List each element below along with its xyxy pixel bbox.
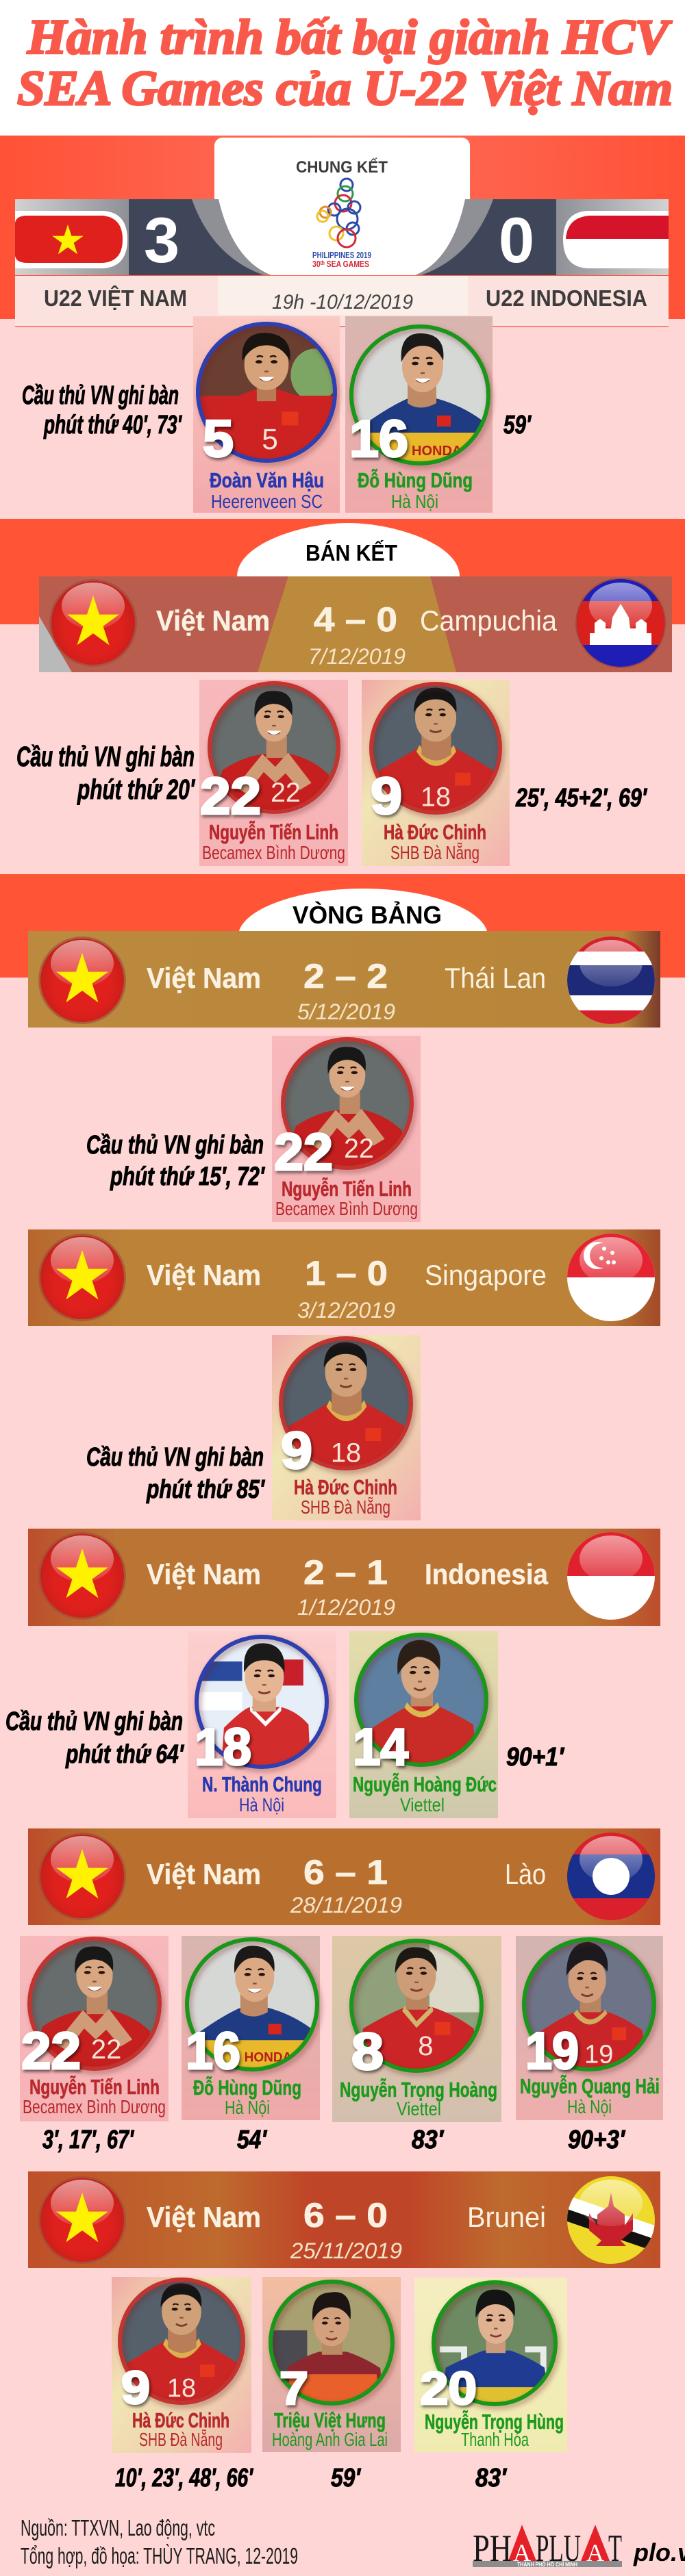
panel: final — [0, 136, 685, 513]
flag: Cambodia — [575, 578, 666, 668]
match bar: Vietnam - Laos: 28/11/2019 — [290, 1893, 402, 1917]
panel: group stage — [0, 874, 685, 2492]
player card: Do Hung Dung: Đỗ Hùng Dũng — [193, 2076, 301, 2100]
panel: semifinal — [0, 519, 685, 866]
goal minutes: Laos match — [42, 2126, 626, 2154]
scorer caption: Cầu thủ VN ghi bàn — [16, 741, 195, 772]
player card: Nguyen Tien Linh — [272, 1036, 421, 1222]
player card: Trieu Viet Hung: 7 — [279, 2362, 308, 2414]
logo: Phap Luat: A — [586, 2539, 604, 2566]
player card: Nguyen Trong Hung — [414, 2278, 567, 2452]
logo: SEA Games 2019 — [312, 179, 371, 269]
goal minutes: Brunei match — [115, 2464, 508, 2492]
player card: Nguyen Tien Linh — [199, 680, 348, 866]
scorer caption: phút thứ 64′ — [65, 1740, 184, 1769]
player card: Nguyen Tien Linh: Nguyễn Tiến Linh — [29, 2075, 160, 2099]
flag: Indonesia — [567, 1532, 655, 1620]
goal minutes: Laos match: 90+3′ — [568, 2126, 626, 2154]
flag: Brunei — [563, 2176, 659, 2264]
goal minutes: Laos match: 54′ — [237, 2126, 268, 2154]
score: 0: 0 — [499, 204, 534, 276]
logo: Phap Luat: THÀNH PHỐ HỒ CHÍ MINH — [517, 2561, 577, 2568]
player card: Nguyen Tien Linh: Becamex Bình Dương — [202, 842, 345, 863]
match bar: Vietnam - Cambodia: Campuchia — [420, 604, 558, 637]
player card: Ha Duc Chinh — [272, 1335, 421, 1520]
player card: Nguyen Tien Linh: 22 — [21, 2022, 81, 2080]
player card: Ha Duc Chinh: SHB Đà Nẵng — [139, 2429, 223, 2450]
player card: Nguyen Tien Linh: Nguyễn Tiến Linh — [209, 820, 338, 844]
player card: Nguyen Quang Hai: Hà Nội — [567, 2096, 612, 2117]
goal minutes: 25′, 45+2′, 69′ — [515, 784, 647, 813]
player card: Nguyen Hoang Duc: Viettel — [400, 1794, 445, 1815]
player card: Nguyen Tien Linh — [20, 1936, 169, 2121]
logo: SEA Games 2019: PHILIPPINES 2019 — [312, 250, 371, 260]
match bar: Vietnam - Thailand: 2 – 2 — [303, 957, 388, 995]
team name strip: U22 INDONESIA — [486, 285, 647, 311]
player card: Do Hung Dung: 16 — [186, 2022, 240, 2080]
source credits: Tổng hợp, đồ họa: THÙY TRANG, 12-2019 — [21, 2543, 298, 2568]
title — [17, 10, 673, 116]
player card: Nguyen Trong Hung: Thanh Hóa — [461, 2429, 529, 2450]
player card: Trieu Viet Hung: Hoàng Anh Gia Lai — [272, 2429, 388, 2450]
scorer caption: phút thứ 15′, 72′ — [110, 1162, 265, 1191]
heading box: chung ket — [214, 138, 470, 206]
player card: Doan Van Hau: Heerenveen SC — [211, 491, 323, 512]
player card: Do Hung Dung — [182, 1936, 320, 2120]
match bar: Vietnam - Cambodia: Việt Nam — [156, 604, 270, 637]
scorer caption: Cầu thủ VN ghi bàn — [86, 1131, 264, 1160]
player card: Ha Duc Chinh: SHB Đà Nẵng — [301, 1496, 390, 1518]
player card: Do Hung Dung: Đỗ Hùng Dũng — [358, 468, 473, 492]
player card: Nguyen Trong Hoang: 8 — [351, 2023, 384, 2081]
player card: Ha Duc Chinh — [112, 2277, 251, 2453]
scorer caption — [16, 741, 196, 805]
flag: Singapore — [567, 1234, 655, 1321]
match bar: Vietnam - Brunei: 6 – 0 — [303, 2196, 388, 2234]
player card: Doan Van Hau — [193, 316, 340, 513]
scorer caption: phút thứ 20′ — [77, 774, 196, 805]
title: SEA Games của U-22 Việt Nam — [17, 61, 673, 116]
player card: N. Thanh Chung: Hà Nội — [239, 1794, 284, 1815]
goal minutes: Laos match: 83′ — [412, 2126, 445, 2154]
match bar: Vietnam - Cambodia — [39, 576, 672, 672]
scoreboard — [15, 199, 669, 276]
player card: Ha Duc Chinh: Hà Đức Chinh — [294, 1475, 397, 1499]
player card: N. Thanh Chung: N. Thành Chung — [202, 1772, 322, 1796]
heading box: chung ket: CHUNG KẾT — [296, 157, 388, 177]
player card: Nguyen Trong Hoang: Viettel — [397, 2098, 441, 2119]
goal minutes: Laos match: 3′, 17′, 67′ — [42, 2126, 134, 2154]
match bar: Vietnam - Singapore — [28, 1229, 660, 1326]
match bar: Vietnam - Indonesia: 2 – 1 — [303, 1553, 388, 1592]
match bar: Vietnam - Laos: Lào — [505, 1858, 546, 1890]
match bar: Vietnam - Brunei — [28, 2171, 660, 2268]
goal minute: 90+1′ — [506, 1743, 565, 1772]
title: Hành trình bất bại giành HCV — [27, 10, 672, 64]
team name strip — [15, 276, 669, 327]
logo: Phap Luat: PLU — [536, 2527, 581, 2570]
match bar: Vietnam - Brunei: Brunei — [467, 2201, 546, 2233]
player card: Nguyen Tien Linh: 22 — [200, 767, 261, 826]
player card: Nguyen Quang Hai: 19 — [525, 2022, 579, 2080]
player card: Nguyen Hoang Duc: Nguyễn Hoàng Đức — [353, 1772, 497, 1796]
match bar: Vietnam - Indonesia — [28, 1529, 660, 1626]
player card: Ha Duc Chinh: Hà Đức Chinh — [132, 2408, 229, 2432]
player card: Ha Duc Chinh — [362, 680, 510, 866]
scorer caption — [5, 1707, 184, 1769]
player card: Do Hung Dung: Hà Nội — [391, 491, 438, 512]
top white header area — [0, 0, 685, 136]
logo: Phap Luat: A — [513, 2539, 531, 2566]
source credits: Nguồn: TTXVN, Lao động, vtc — [21, 2515, 215, 2540]
match bar: Vietnam - Brunei: Việt Nam — [147, 2201, 261, 2233]
player card: Ha Duc Chinh: 9 — [121, 2362, 150, 2414]
player card: Doan Van Hau: Đoàn Văn Hậu — [210, 468, 324, 492]
goal minutes: Brunei match: 83′ — [475, 2464, 508, 2492]
player card: Ha Duc Chinh: 9 — [371, 767, 402, 826]
player card: Do Hung Dung — [345, 316, 493, 513]
player card: Doan Van Hau: 5 — [203, 410, 234, 468]
player card: Trieu Viet Hung: Triệu Việt Hưng — [274, 2408, 386, 2432]
match bar: Vietnam - Thailand: 5/12/2019 — [297, 999, 395, 1024]
match bar: Vietnam - Singapore: Việt Nam — [147, 1259, 261, 1291]
player card: Nguyen Trong Hung: 20 — [420, 2362, 477, 2414]
scorer caption — [86, 1131, 265, 1191]
heading: ban ket — [237, 523, 460, 576]
match bar: Vietnam - Singapore: 3/12/2019 — [297, 1298, 395, 1323]
match bar: Vietnam - Singapore: Singapore — [425, 1259, 547, 1291]
scorer caption: Cầu thủ VN ghi bàn — [22, 381, 179, 410]
heading: vong bang: VÒNG BẢNG — [292, 900, 442, 929]
match bar: Vietnam - Laos — [28, 1828, 660, 1925]
match bar: Vietnam - Thailand: Thái Lan — [445, 962, 546, 994]
heading: vong bang — [239, 889, 487, 931]
player card: Trieu Viet Hung — [262, 2277, 401, 2452]
player card: Nguyen Trong Hung: Nguyễn Trọng Hùng — [425, 2410, 564, 2434]
player card: N. Thanh Chung: 18 — [195, 1718, 251, 1776]
flag: Thailand — [567, 936, 655, 1024]
team name strip: 19h -10/12/2019 — [272, 291, 413, 314]
player card: Do Hung Dung: Hà Nội — [225, 2097, 270, 2118]
player card: Nguyen Trong Hoang: Nguyễn Trọng Hoàng — [340, 2078, 497, 2102]
goal minutes: Brunei match: 59′ — [331, 2464, 362, 2492]
match bar: Vietnam - Indonesia: 1/12/2019 — [297, 1595, 395, 1620]
player card: Nguyen Tien Linh: Nguyễn Tiến Linh — [282, 1177, 412, 1201]
player card: Nguyen Trong Hoang — [332, 1936, 501, 2122]
match bar: Vietnam - Brunei: 25/11/2019 — [290, 2239, 402, 2263]
match bar: Vietnam - Thailand: Việt Nam — [147, 962, 261, 994]
match bar: Vietnam - Laos: Việt Nam — [147, 1858, 261, 1890]
match bar: Vietnam - Thailand — [28, 931, 660, 1028]
flag: Laos — [567, 1833, 655, 1920]
scorer caption — [86, 1443, 265, 1504]
heading: ban ket: BÁN KẾT — [306, 540, 397, 565]
logo: SEA Games 2019: 30ᵗʰ SEA GAMES — [312, 259, 369, 269]
player card: Nguyen Tien Linh: Becamex Bình Dương — [275, 1198, 418, 1219]
player card: Nguyen Hoang Duc: 14 — [353, 1718, 408, 1776]
player card: Nguyen Hoang Duc — [349, 1631, 498, 1818]
player card: Nguyen Tien Linh: Becamex Bình Dương — [23, 2096, 166, 2117]
logo: Phap Luat: T — [608, 2527, 622, 2570]
red band: final — [0, 136, 685, 319]
scorer caption: phút thứ 85′ — [146, 1475, 265, 1504]
match bar: Vietnam - Indonesia: Việt Nam — [147, 1558, 261, 1590]
player card: Do Hung Dung: 16 — [349, 410, 408, 468]
team name strip: U22 VIỆT NAM — [44, 285, 187, 311]
score: 3: 3 — [144, 204, 179, 276]
flag: Vietnam — [15, 211, 127, 268]
flag: Indonesia — [563, 211, 669, 268]
player card: N. Thanh Chung — [188, 1631, 336, 1818]
logo: Phap Luat: PH — [473, 2527, 512, 2570]
player card: Ha Duc Chinh: Hà Đức Chinh — [384, 820, 486, 844]
match bar: Vietnam - Singapore: 1 – 0 — [305, 1254, 388, 1292]
source credits — [21, 2515, 298, 2568]
match bar: Vietnam - Cambodia: 7/12/2019 — [308, 644, 406, 669]
player card: Nguyen Quang Hai — [516, 1936, 663, 2120]
goal minute: 59′ — [503, 411, 532, 439]
scorer caption: phút thứ 40′, 73′ — [43, 411, 182, 439]
goal minutes: Brunei match: 10′, 23′, 48′, 66′ — [115, 2464, 253, 2492]
red band: semifinal — [0, 519, 685, 624]
red band: group stage — [0, 874, 685, 978]
scorer caption — [22, 381, 182, 439]
player card: Ha Duc Chinh: 9 — [281, 1422, 312, 1480]
match bar: Vietnam - Laos: 6 – 1 — [303, 1853, 388, 1891]
scorer caption: Cầu thủ VN ghi bàn — [5, 1707, 183, 1736]
match bar: Vietnam - Cambodia: 4 – 0 — [314, 600, 397, 639]
player card: Nguyen Tien Linh: 22 — [274, 1123, 333, 1182]
match bar: Vietnam - Indonesia: Indonesia — [425, 1558, 549, 1590]
scorer caption: Cầu thủ VN ghi bàn — [86, 1443, 264, 1472]
logo: Phap Luat — [473, 2525, 622, 2570]
player card: Ha Duc Chinh: SHB Đà Nẵng — [390, 842, 480, 863]
